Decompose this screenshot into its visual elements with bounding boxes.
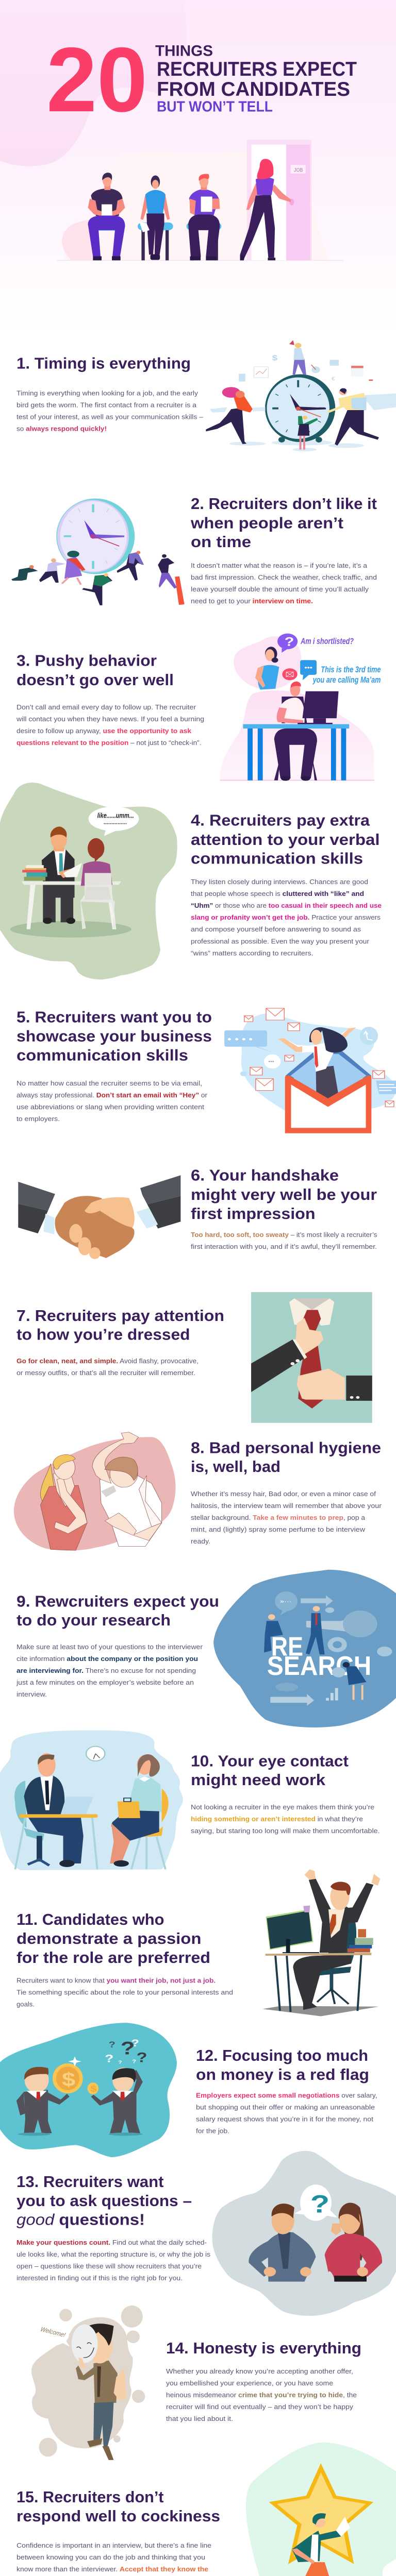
text block: stellar background. Take a few minutes to prep , pop a xyxy=(191,1514,366,1521)
text block: slang or profanity won’t get the job. Practice your answers xyxy=(191,913,381,921)
right man xyxy=(91,2067,143,2136)
title line: BUT WON'T TELL: BUT WON’T TELL xyxy=(157,99,273,115)
heading xyxy=(196,2046,369,2083)
text block: “Uhm” or those who are too casual in their speech and use xyxy=(191,902,382,909)
man xyxy=(76,2324,126,2460)
star xyxy=(273,2468,370,2561)
panel: 14. Honesty xyxy=(31,2306,361,2460)
heading: doesn’t go over well xyxy=(16,671,174,689)
illustration: candidate calling recruiter xyxy=(220,634,381,781)
table xyxy=(15,1814,98,1869)
big number 20: 20 xyxy=(46,28,147,131)
question marks xyxy=(105,2038,147,2065)
panel: 5. Business communication skills xyxy=(16,1008,396,1133)
heading: on time xyxy=(191,533,251,551)
text block: leave yourself double the amount of time you’ll actually xyxy=(191,585,369,593)
heading xyxy=(191,1166,377,1223)
text block xyxy=(16,1643,203,1698)
text block: bad first impression. Check the weather, check traffic, and xyxy=(191,573,377,581)
door: JOB xyxy=(294,167,303,173)
big coin xyxy=(53,2056,83,2093)
text block xyxy=(16,389,204,433)
illustration: man and woman wondering xyxy=(249,2184,382,2282)
alarm clock xyxy=(265,374,335,443)
text block: mint, and (lightly) spray some perfume to be interview xyxy=(191,1526,366,1533)
text block: desire to follow up anyway, use the opportunity to ask xyxy=(16,727,192,735)
text block: first interaction with you, and if it’s awful, they’ll remember. xyxy=(191,1243,377,1250)
walking businessman xyxy=(158,554,177,588)
illustration: woman rising from envelope xyxy=(224,1008,396,1133)
wall clock xyxy=(86,1747,105,1761)
header illustration: candidates waiting at a job door xyxy=(57,140,343,261)
panel: 8. Bad personal hygiene xyxy=(14,1432,382,1551)
question marks: ? xyxy=(109,2040,116,2049)
text block: questions relevant to the position – not just to “check-in”. xyxy=(16,739,201,747)
man in suit xyxy=(42,826,78,924)
text block: and compose yourself before answering to sound as xyxy=(191,925,361,933)
text block: are interviewing for. There’s no excuse for not spending xyxy=(16,1667,196,1674)
text block: Recruiters want to know that you want their job, not just a job. xyxy=(16,1976,216,1985)
lightbulb xyxy=(306,1611,377,1637)
heading xyxy=(16,1008,212,1064)
woman on phone xyxy=(255,647,279,690)
faded icons: € xyxy=(332,377,336,382)
text block: Whether you already know you’re accepting another offer, xyxy=(166,2367,353,2375)
mail icons xyxy=(244,1008,394,1107)
lower hand xyxy=(297,1369,345,1400)
books and mug xyxy=(348,1929,373,1953)
question marks: ? xyxy=(132,2059,136,2064)
heading: 2. Recruiters don’t like it xyxy=(191,495,377,513)
desk xyxy=(243,724,349,781)
recruiter at desk xyxy=(274,682,317,781)
speech bubble with arrows xyxy=(275,1591,298,1615)
text block: Make your questions count. Find out what the daily sched- xyxy=(16,2239,207,2246)
heading: good questions! xyxy=(16,2211,145,2229)
question marks: ? xyxy=(137,2049,147,2065)
illustration: happy man at desk xyxy=(263,1869,380,2016)
laptop xyxy=(61,1797,93,1814)
right sleeve xyxy=(346,1376,372,1401)
text block: Whether it’s messy hair, Bad odor, or even a minor case of xyxy=(191,1490,376,1498)
left sleeve xyxy=(18,1182,67,1234)
text block: Go for clean, neat, and simple. Avoid flashy, provocative, xyxy=(16,1357,199,1365)
heading: respond well to cockiness xyxy=(16,2507,220,2525)
heading: 3. Pushy behavior xyxy=(16,652,157,670)
upper hand xyxy=(295,1318,323,1354)
panel: 11. Passion for the role xyxy=(16,1869,380,2016)
illustration: research concept xyxy=(213,1570,396,1727)
woman in purple skirt xyxy=(62,551,86,585)
heading xyxy=(16,2488,220,2525)
heading: on money is a red flag xyxy=(196,2065,369,2083)
seated man with red hair xyxy=(187,174,221,260)
clock xyxy=(56,498,135,574)
heading: 7. Recruiters pay attention xyxy=(16,1307,224,1325)
desk xyxy=(22,882,121,929)
text block: that people whose speech is cluttered with “like” and xyxy=(191,890,364,897)
text block xyxy=(191,1231,377,1250)
text block: will contact you when they have news. If you feel a burning xyxy=(16,715,204,723)
text block: Make sure at least two of your questions to the interviewer xyxy=(16,1643,203,1651)
welcome bubble: Welcome! xyxy=(39,2325,67,2338)
question marks: ? xyxy=(131,2038,139,2048)
heading: to do your research xyxy=(16,1611,171,1629)
heading: for the role are preferred xyxy=(16,1948,210,1967)
speech: am i shortlisted: Am i shortlisted? xyxy=(300,636,354,646)
faded icons: $ xyxy=(272,354,278,362)
speech bubble with arrows: »··· xyxy=(280,1598,292,1604)
heading: might need work xyxy=(191,1771,326,1789)
woman candidate xyxy=(80,838,116,929)
small white bubble xyxy=(264,1055,280,1069)
text block: between knowing you can do the job and thinking that you xyxy=(16,2553,205,2561)
desk xyxy=(265,1953,371,2012)
heading xyxy=(16,652,174,689)
text block: for the job. xyxy=(196,2127,229,2135)
text block: use abbreviations or slang when providing written content xyxy=(16,1103,204,1111)
donut chart xyxy=(330,1639,344,1650)
heading: 8. Bad personal hygiene xyxy=(191,1439,381,1457)
running man xyxy=(327,388,379,446)
faded icons xyxy=(239,354,373,382)
woman xyxy=(110,1754,162,1867)
question bubble xyxy=(294,2184,337,2221)
text block: goals. xyxy=(16,2000,35,2008)
yellow bag xyxy=(118,1798,140,1818)
text block: just a few minutes on the employer’s website before an xyxy=(16,1679,194,1686)
heading: first impression xyxy=(191,1205,316,1223)
panel: 3. Pushy behavior xyxy=(16,634,381,781)
woman with magnifier xyxy=(332,1662,366,1700)
heading: 13. Recruiters want xyxy=(16,2173,164,2191)
left hand xyxy=(55,1196,135,1258)
man chair xyxy=(14,1781,50,1866)
heading: attention to your verbal xyxy=(191,831,380,849)
text block: or messy outfits, or that’s all the recruiter will remember. xyxy=(16,1369,195,1377)
odor cloud xyxy=(101,1485,116,1497)
text block xyxy=(16,1357,199,1377)
heading: when people aren’t xyxy=(190,514,343,532)
text block: Too hard, too soft, too sweaty – it’s most likely a recruiter’s xyxy=(191,1231,377,1239)
illustration: bad odor scene xyxy=(14,1432,176,1551)
question marks: ? xyxy=(105,2053,113,2065)
big coin: $ xyxy=(62,2069,75,2090)
text block xyxy=(16,2239,211,2282)
woman xyxy=(325,2203,382,2282)
header background xyxy=(0,0,396,330)
left man xyxy=(16,2067,70,2136)
RE SEARCH lettering: RE xyxy=(271,1631,303,1662)
heading: you to ask questions – xyxy=(16,2192,192,2210)
panel: 10. Eye contact xyxy=(0,1731,380,1870)
text block: halitosis, the interview team will remember that above your xyxy=(191,1502,382,1510)
man with laptop xyxy=(24,1753,84,1867)
thinking man xyxy=(264,1614,283,1653)
heading xyxy=(191,1439,381,1476)
text block: recruiter will find out eventually – and they won’t be happy xyxy=(166,2403,354,2411)
illustration: adjusting a tie xyxy=(251,1292,372,1423)
panel: 12. Focusing on money xyxy=(0,2023,377,2157)
text block xyxy=(191,562,377,605)
woman chair xyxy=(131,1789,169,1869)
text block: heinous misdemeanor crime that you’re trying to hide , the xyxy=(166,2391,357,2399)
text block xyxy=(191,1803,380,1835)
mask xyxy=(72,2325,98,2368)
illustration: man holding a smiling mask xyxy=(31,2306,145,2460)
collar xyxy=(289,1298,334,1326)
heading: to how you’re dressed xyxy=(16,1326,190,1344)
envelope xyxy=(285,1075,371,1133)
heading xyxy=(191,1752,349,1789)
icon: mail xyxy=(282,668,298,680)
panel: 15. Cockiness xyxy=(16,2442,396,2576)
question marks: ? xyxy=(121,2038,135,2058)
heading: 15. Recruiters don’t xyxy=(16,2488,164,2506)
text block: They listen closely during interviews. Chances are good xyxy=(191,878,368,886)
text block: test of your interest, as well as your communication skills – xyxy=(16,413,204,421)
right hand xyxy=(85,1197,135,1228)
text block: salary request shows that you’re in it for the money, not xyxy=(196,2115,373,2123)
speech bubble: ............... xyxy=(104,819,127,825)
chair xyxy=(317,1906,356,2004)
panel: 7. How you're dressed xyxy=(16,1292,372,1423)
title line: THINGS: THINGS xyxy=(155,42,213,60)
heading xyxy=(16,1592,219,1629)
heading: 12. Focusing too much xyxy=(196,2046,368,2064)
illustration: handshake xyxy=(18,1175,180,1259)
heading: 5. Recruiters want you to xyxy=(16,1008,212,1026)
heading: showcase your business xyxy=(16,1027,212,1045)
heading: 6. Your handshake xyxy=(191,1166,339,1184)
text block: Don’t call and email every day to follow up. The recruiter xyxy=(16,703,196,711)
text block xyxy=(16,2541,211,2576)
crouching man xyxy=(11,565,38,581)
text block: but shopping out their offer or making an unreasonable xyxy=(196,2103,375,2111)
woman xyxy=(40,1454,87,1550)
right sleeve xyxy=(129,1175,180,1228)
text block: No matter how casual the recruiter seems to be via email, xyxy=(16,1079,202,1087)
pushing man right xyxy=(117,551,144,581)
question bubble: ? xyxy=(285,635,294,649)
text block xyxy=(166,2367,357,2422)
text block: hiding something or aren’t interested in what they’re xyxy=(191,1815,363,1823)
title line: FROM CANDIDATES: FROM CANDIDATES xyxy=(157,78,350,100)
text block: Employers expect some small negotiations over salary, xyxy=(196,2092,377,2099)
text block: ready. xyxy=(191,1537,210,1545)
text block: Tie something specific about the role to your personal interests and xyxy=(16,1988,233,1996)
heading xyxy=(190,495,377,551)
text block: ule looks like, what the reporting structure is, or why the job is xyxy=(16,2250,211,2258)
monitor xyxy=(298,691,339,724)
falling red bar xyxy=(175,577,185,605)
chat bubble: ••• xyxy=(304,664,312,671)
heading: communication skills xyxy=(16,1046,188,1064)
title xyxy=(46,28,357,131)
seated man with paper xyxy=(88,173,125,260)
envelope back xyxy=(286,1048,371,1101)
seated woman with blue shirt xyxy=(138,175,173,260)
illustration: man polishing a star xyxy=(246,2442,396,2576)
heading xyxy=(191,811,380,868)
heading: demonstrate a passion xyxy=(16,1929,201,1947)
text block xyxy=(16,1976,233,2008)
welcome bubble xyxy=(35,2324,70,2347)
gray blob background xyxy=(212,2151,396,2316)
standing man xyxy=(306,1606,325,1654)
text block: bird gets the worm. The first contact from a recruiter is a xyxy=(16,401,197,409)
illustration: people carrying a wall clock xyxy=(11,498,185,605)
illustration: team around alarm clock xyxy=(206,340,396,451)
woman entering door xyxy=(240,159,291,260)
door xyxy=(247,140,311,260)
small white bubble: ••• xyxy=(268,1059,274,1064)
heading: 4. Recruiters pay extra xyxy=(191,811,370,829)
text block: know more than the interviewer. Accept that they know the xyxy=(16,2565,208,2573)
text block: Confidence is important in an interview, but there’s a fine line xyxy=(16,2541,211,2549)
text block: so always respond quickly! xyxy=(16,425,107,433)
title line: RECRUITERS EXPECT: RECRUITERS EXPECT xyxy=(157,58,357,80)
heading: 11. Candidates who xyxy=(16,1910,164,1928)
text block: saying, but staring too long will make them uncomfortable. xyxy=(191,1827,380,1835)
woman xyxy=(278,1027,356,1099)
person on top with megaphone xyxy=(289,340,306,375)
man xyxy=(286,2513,350,2576)
text block: need to get to your interview on time. xyxy=(191,597,313,605)
heading: is, well, bad xyxy=(191,1458,280,1476)
question bubble: ? xyxy=(310,2190,329,2218)
green blob background xyxy=(0,783,177,979)
text block xyxy=(196,2092,377,2135)
green runner xyxy=(82,573,112,605)
text block: always stay professional. Don’t start an email with “Hey” or xyxy=(16,1091,208,1099)
panel: 4. Verbal communication xyxy=(0,783,382,979)
man xyxy=(249,2204,316,2282)
left sleeve xyxy=(251,1340,307,1392)
text block: Timing is everything when looking for a job, and the early xyxy=(16,389,199,397)
RE SEARCH lettering xyxy=(267,1631,371,1681)
text block: interested in finding out if this is the right job for you. xyxy=(16,2274,183,2282)
text block: open – questions like these will show recruiters that you’re xyxy=(16,2262,202,2270)
running woman xyxy=(206,387,265,444)
phone bubble xyxy=(360,1027,378,1045)
text block: Not looking a recruiter in the eye makes them think you’re xyxy=(191,1803,374,1811)
chat bubble dots xyxy=(224,1030,273,1053)
tie xyxy=(298,1310,325,1409)
heading xyxy=(16,2173,192,2229)
books xyxy=(22,865,47,880)
heading: 9. Rewcruiters expect you xyxy=(16,1592,219,1611)
text block xyxy=(16,1079,208,1123)
illustration: interview across a table xyxy=(0,1731,183,1870)
text block: to employers. xyxy=(16,1115,60,1123)
illustration: interview at a desk xyxy=(10,807,139,938)
text block: “wins” matters according to recruiters. xyxy=(191,949,314,957)
man with raised arm xyxy=(92,1432,162,1547)
speech bubble: like......umm... xyxy=(97,812,134,820)
heading xyxy=(16,1910,210,1967)
heading xyxy=(16,1307,224,1344)
question bubble xyxy=(277,634,298,653)
heading: communication skills xyxy=(191,849,363,868)
heading: 10. Your eye contact xyxy=(191,1752,349,1770)
monitor xyxy=(266,1905,319,1953)
panel: 6. Handshake xyxy=(18,1166,377,1259)
speech bubble xyxy=(89,807,139,836)
man celebrating xyxy=(293,1869,380,2010)
small coin: $ xyxy=(90,2084,97,2094)
text block xyxy=(16,703,204,747)
text block: interview. xyxy=(16,1690,47,1698)
heading: might very well be your xyxy=(191,1185,377,1204)
text block xyxy=(191,1490,382,1545)
panel: 13. Ask good questions xyxy=(16,2151,396,2316)
heading: 14. Honesty is everything xyxy=(166,2339,361,2357)
heading: 1. Timing is everything xyxy=(16,354,191,372)
text block: cite information about the company or the position you xyxy=(16,1655,198,1663)
mail bubble xyxy=(376,1080,396,1094)
text block: that you lied about it. xyxy=(166,2415,233,2422)
panel: 2. Recruiters don't like it when people aren't on time xyxy=(11,495,377,605)
panel: 9. Do your research xyxy=(16,1570,396,1727)
question marks: ? xyxy=(118,2060,122,2065)
chat bubble xyxy=(300,660,317,680)
clouds and bars xyxy=(275,1607,392,1701)
panel: 1. Timing is everything xyxy=(16,340,396,451)
illustration: two businessmen and coins xyxy=(0,2023,177,2157)
small woman under clock hands xyxy=(298,416,318,450)
text block: It doesn’t matter what the reason is – if you’re late, it’s a xyxy=(191,562,368,569)
text block: you embellished your experience, or you have some xyxy=(166,2379,333,2387)
kneeling man xyxy=(39,558,65,583)
small coin xyxy=(88,2082,98,2094)
text block xyxy=(191,878,382,957)
text block: professional as possible. Even the way you present your xyxy=(191,938,370,945)
